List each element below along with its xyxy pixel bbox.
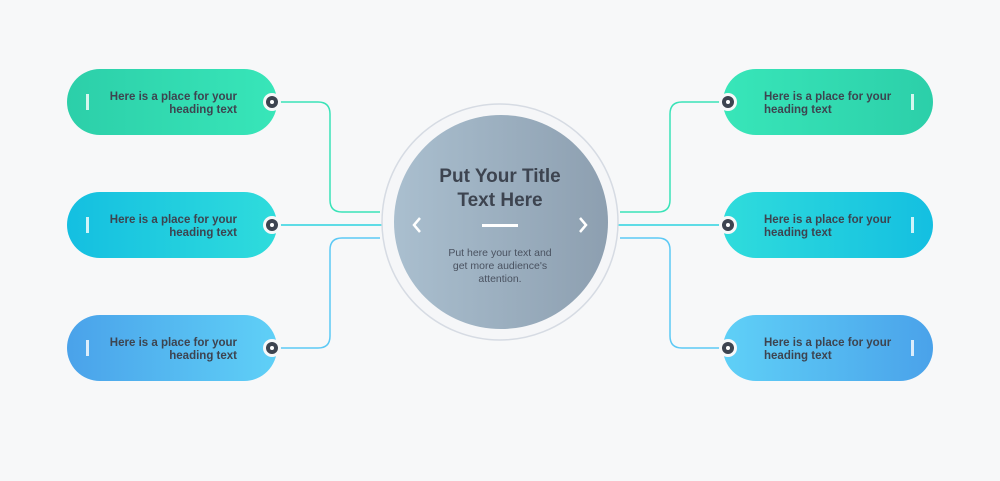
panel: right 1 <box>719 69 933 135</box>
panel: left 1: Here is a place for your <box>110 91 238 103</box>
center circle: Text Here <box>457 190 543 211</box>
panel: right 1: Here is a place for your <box>764 91 892 103</box>
center circle: get more audience's <box>453 260 547 272</box>
panel: right 2: Here is a place for your <box>764 214 892 226</box>
arrows <box>414 218 420 232</box>
center title: Put Your Title <box>439 166 561 187</box>
panel: left 1 <box>67 69 281 135</box>
panel: left 1: heading text <box>169 104 237 116</box>
panel: right 1: heading text <box>764 104 832 116</box>
center circle <box>382 104 618 340</box>
panel: right 3 <box>719 315 933 381</box>
panel: left 3: Here is a place for your <box>110 337 238 349</box>
center body text: Put here your text and <box>448 247 552 259</box>
panel: left 3: heading text <box>169 350 237 362</box>
panel: left 2 <box>67 192 281 258</box>
panel: right 2 <box>719 192 933 258</box>
connectors <box>278 102 722 348</box>
panel: right 2: heading text <box>764 227 832 239</box>
center circle: attention. <box>478 273 522 285</box>
panel: left 2: heading text <box>169 227 237 239</box>
panel: right 3: Here is a place for your <box>764 337 892 349</box>
panel: left 3 <box>67 315 281 381</box>
panel: left 2: Here is a place for your <box>110 214 238 226</box>
panel: right 3: heading text <box>764 350 832 362</box>
